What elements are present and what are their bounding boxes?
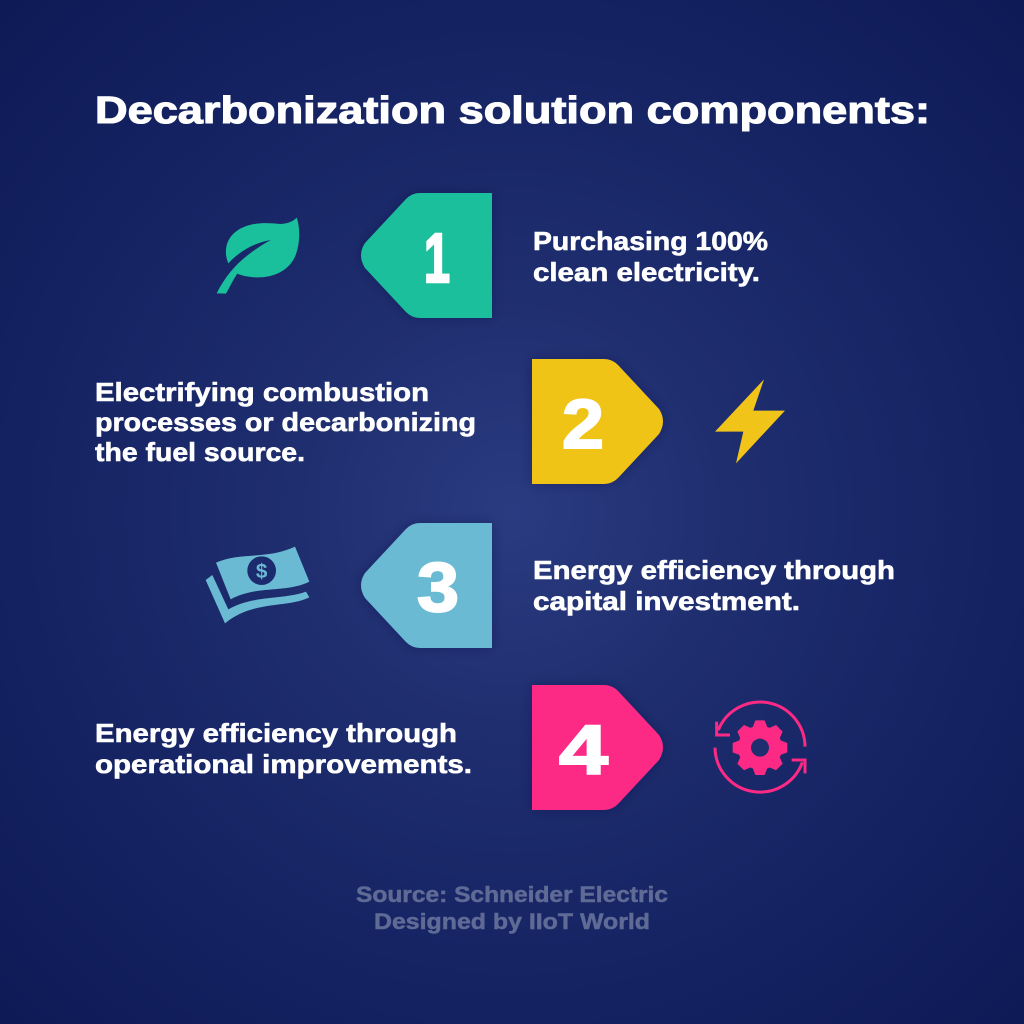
row 1: clean electricity [217,193,768,318]
icon: gear with rotating arrows [715,702,805,792]
text: electrifying combustion: the fuel source. [95,437,305,467]
text: capital investment [533,555,895,616]
text: operational improvements: operational improvements. [95,749,472,779]
arrow badge 4 [532,685,663,810]
source credit: Designed by IIoT World [374,909,650,934]
text: electrifying combustion: Electrifying combustion [95,377,429,407]
text: electrifying combustion [95,377,476,467]
text: operational improvements: Energy efficiency through [95,718,457,748]
arrow badge 3: 3 [417,548,459,626]
text: capital investment: capital investment. [533,586,800,616]
arrow badge 3 [361,523,492,648]
arrow badge 2 [532,359,663,484]
arrow badge 2: 2 [562,385,604,463]
text: purchasing clean electricity: clean electricity. [533,257,760,287]
text: operational improvements [95,718,472,779]
row 4: operational improvements [95,685,805,810]
arrow badge 4: 4 [559,711,608,789]
arrow badge 1 [361,193,492,318]
text: purchasing clean electricity: Purchasing 100% [533,226,768,256]
row 3: capital investment [206,523,895,648]
icon: leaf [217,218,299,294]
text: electrifying combustion: processes or decarbonizing [95,407,476,437]
title: Decarbonization solution components: [95,90,930,132]
icon: lightning bolt [715,379,785,463]
arrow badge 1: 1 [424,219,450,297]
row 2: electrifying [95,359,785,484]
text: purchasing clean electricity [533,226,768,287]
text: capital investment: Energy efficiency through [533,555,895,585]
source credit [356,882,668,934]
icon: money: $ [256,560,268,583]
source credit: Source: Schneider Electric [356,882,668,907]
icon: money [206,547,309,623]
